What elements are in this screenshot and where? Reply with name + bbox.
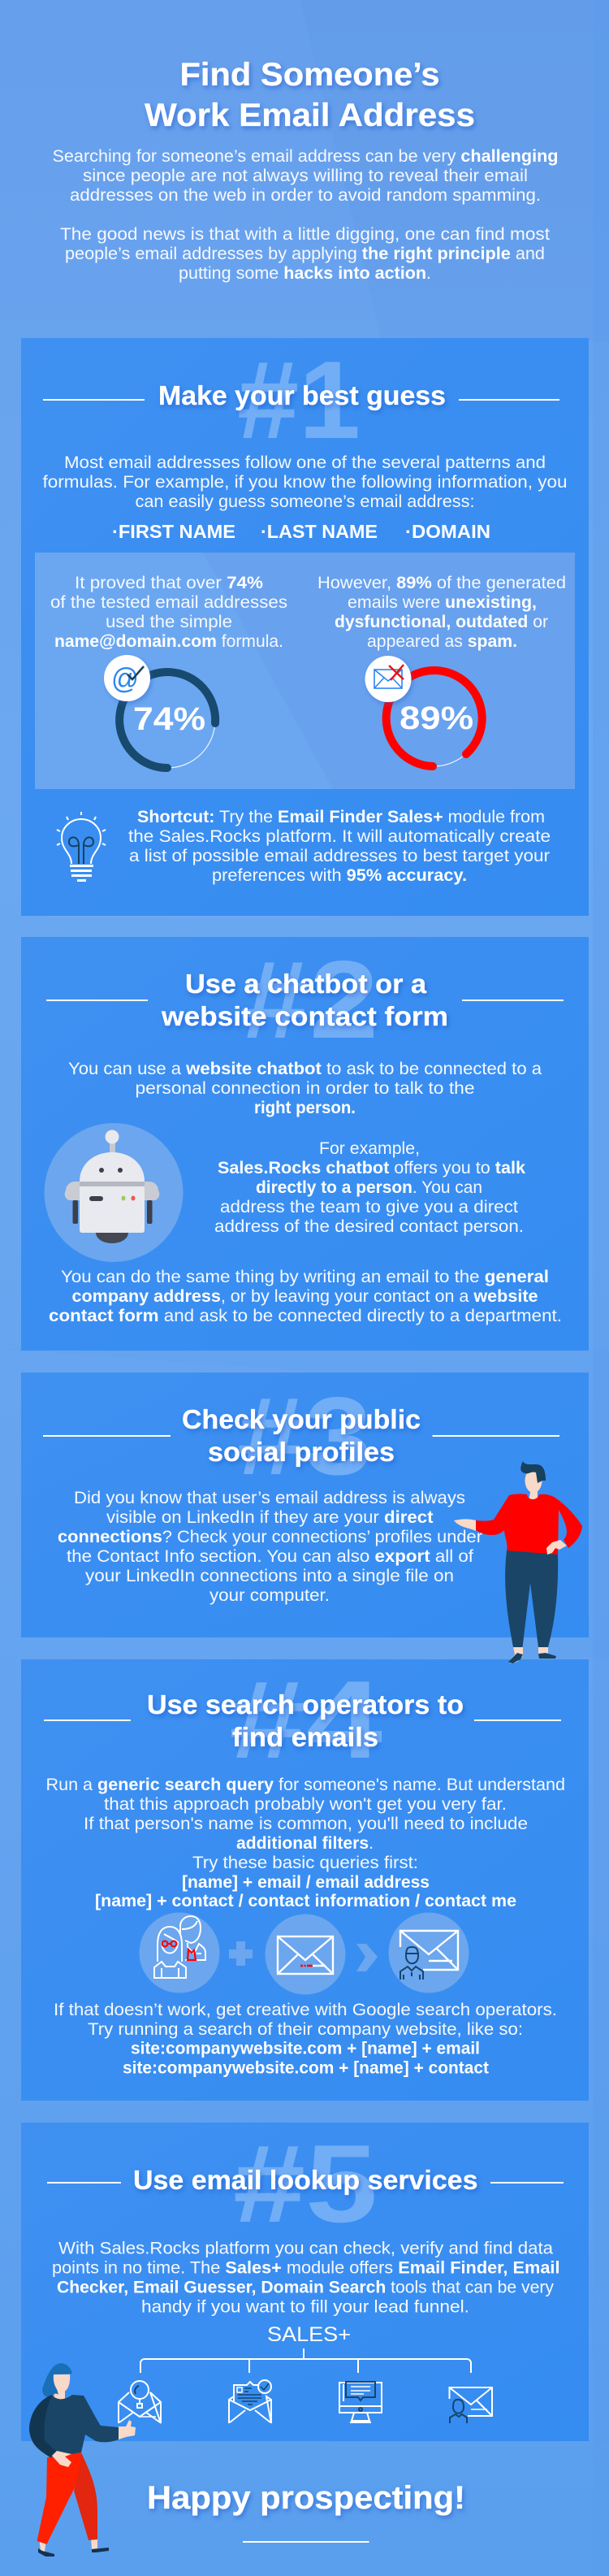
- donut chart 89%: 89%: [400, 700, 473, 736]
- text: sales rocks platform: [52, 2240, 560, 2316]
- text: generic search query: [name] + email / email address: [182, 1873, 430, 1892]
- panel: statistics: [35, 553, 575, 789]
- closing message: Happy prospecting!: [147, 2480, 465, 2516]
- icon: email guesser monitor: [339, 2382, 382, 2422]
- heading 2: [46, 969, 564, 1031]
- text: google search operators: Try running a search of their company website, like so:: [88, 2020, 523, 2039]
- text: patterns and formulas: can easily guess someone’s email address:: [135, 492, 474, 511]
- text: sales rocks chatbot example: For example,: [319, 1139, 420, 1158]
- number watermark 5: #5: [233, 2122, 378, 2245]
- icon: woman and man: [140, 1913, 219, 1993]
- text: general company address: You can do the same thing by writing an email to the general: [61, 1268, 549, 1286]
- text: sales rocks chatbot example: [214, 1139, 525, 1236]
- heading 5: Use email lookup services: [133, 2165, 477, 2195]
- intro text: people’s email addresses by applying the right principle and: [65, 245, 545, 263]
- heading 4: find emails: [232, 1722, 378, 1752]
- stat text 89%: emails were unexisting,: [348, 593, 537, 612]
- text: website chatbot: You can use a website chatbot to ask to be connected to a: [68, 1060, 542, 1078]
- title: [145, 57, 475, 133]
- heading 1: Make your best guess: [158, 380, 446, 410]
- text: linkedin connections: connections? Check your connections’ profiles under: [58, 1528, 482, 1546]
- stat text 74%: [50, 574, 287, 651]
- shortcut text: a list of possible email addresses to best target your: [129, 847, 550, 865]
- intro text: putting some hacks into action.: [179, 264, 431, 283]
- text: sales rocks chatbot example: directly to a person. You can: [256, 1178, 482, 1197]
- donut chart 74%: 74%: [133, 701, 205, 737]
- intro text: The good news is that with a little digging, one can find most: [60, 225, 550, 244]
- text: google search operators: site:companywebsite.com + [name] + email: [131, 2040, 480, 2058]
- stat text 89%: dysfunctional, outdated or: [335, 613, 548, 631]
- text: website chatbot: [68, 1060, 542, 1117]
- diagram: people plus email gives contact: [140, 1913, 469, 1994]
- panel: tip 1 make your best guess: [21, 338, 589, 916]
- number watermark 1: #1: [237, 338, 361, 462]
- intro text: addresses on the web in order to avoid random spamming.: [70, 186, 541, 205]
- stat text 89%: appeared as spam.: [367, 632, 517, 651]
- text: general company address: contact form and ask to be connected directly to a department.: [49, 1307, 562, 1325]
- heading 3: social profiles: [208, 1437, 395, 1467]
- text: website chatbot: right person.: [254, 1099, 356, 1117]
- text: sales rocks platform: handy if you want to fill your lead funnel.: [141, 2298, 469, 2316]
- number watermark 4: #4: [229, 1658, 382, 1781]
- text: general company address: company address, or by leaving your contact on a website: [71, 1287, 538, 1306]
- illustration: man in red sweater: [454, 1461, 582, 1663]
- icon: envelope with contact person: [388, 1913, 469, 1993]
- stat text 74%: of the tested email addresses: [50, 593, 287, 612]
- icon: envelope with cross: [365, 656, 411, 702]
- text: generic search query: Run a generic search query for someone's name. But understand: [45, 1776, 565, 1794]
- list: required information: ·FIRST NAME: [112, 521, 235, 542]
- panel: tip 2 chatbot or contact form: [21, 937, 589, 1351]
- icon: at sign with check: @: [111, 661, 139, 695]
- heading 2: Use a chatbot or a: [185, 969, 427, 999]
- title: Find Someone’s: [180, 57, 440, 93]
- heading 2: website contact form: [161, 1001, 448, 1031]
- text: website chatbot: personal connection in order to talk to the: [135, 1079, 474, 1098]
- text: linkedin connections: your LinkedIn connections into a single file on: [85, 1567, 454, 1585]
- text: sales rocks chatbot example: address the team to give you a direct: [220, 1198, 518, 1216]
- icon: light bulb: [57, 812, 106, 882]
- text: linkedin connections: [58, 1489, 482, 1605]
- title: Work Email Address: [145, 98, 475, 133]
- panel: tip 3 public social profiles: [21, 1373, 589, 1637]
- text: patterns and formulas: Most email addresses follow one of the several patterns and: [64, 453, 546, 472]
- icon: robot: [44, 1123, 184, 1262]
- text: generic search query: additional filters.: [236, 1834, 374, 1853]
- label: sales plus: SALES+: [267, 2323, 351, 2346]
- icon: email checker: [229, 2380, 271, 2423]
- list: required information: ·DOMAIN: [405, 521, 490, 542]
- list: required information: [112, 521, 490, 542]
- shortcut text: the Sales.Rocks platform. It will automatically create: [128, 827, 551, 846]
- text: sales rocks platform: With Sales.Rocks platform you can check, verify and find data: [58, 2240, 553, 2257]
- stat text 89%: However, 89% of the generated: [317, 574, 566, 592]
- list: required information: ·LAST NAME: [261, 521, 378, 542]
- text: linkedin connections: the Contact Info section. You can also export all of: [67, 1547, 473, 1566]
- text: generic search query: that this approach probably won't get you very far.: [104, 1795, 507, 1814]
- heading 4: [44, 1689, 561, 1752]
- shortcut text: [128, 808, 551, 885]
- heading 3: Check your public: [182, 1404, 421, 1434]
- intro text: [52, 147, 559, 283]
- icon: email finder: [119, 2381, 161, 2423]
- icon: domain search envelope: [450, 2387, 492, 2423]
- stat text 74%: used the simple: [106, 613, 232, 631]
- heading 3: [43, 1404, 559, 1467]
- text: google search operators: site:companywebsite.com + [name] + contact: [123, 2059, 489, 2077]
- shortcut text: Shortcut: Try the Email Finder Sales+ module from: [137, 808, 545, 826]
- text: sales rocks platform: points in no time. The Sales+ module offers Email Finder, Email: [52, 2259, 560, 2277]
- text: patterns and formulas: formulas. For example, if you know the following information, you: [42, 473, 568, 492]
- icon: plus: [229, 1941, 253, 1966]
- stat text 89%: [317, 574, 566, 651]
- donut chart 74%: [104, 655, 215, 768]
- number watermark 3: #3: [237, 1374, 372, 1498]
- panel: tip 4 search operators: [21, 1658, 589, 2101]
- text: linkedin connections: your computer.: [209, 1586, 330, 1605]
- text: sales rocks chatbot example: address of the desired contact person.: [214, 1217, 524, 1236]
- heading 4: Use search operators to: [147, 1689, 464, 1720]
- stat text 74%: name@domain.com formula.: [54, 632, 283, 651]
- shortcut text: preferences with 95% accuracy.: [212, 866, 467, 885]
- donut chart 89%: [365, 656, 482, 766]
- text: generic search query: [45, 1776, 565, 1910]
- intro text: Searching for someone’s email address can be very challenging: [52, 147, 559, 166]
- panel: tip 5 email lookup services: [21, 2122, 589, 2441]
- intro text: since people are not always willing to reveal their email: [83, 167, 528, 185]
- tree diagram: sales plus modules: [119, 2323, 492, 2423]
- text: general company address: [49, 1268, 562, 1325]
- text: sales rocks platform: Checker, Email Guesser, Domain Search tools that can be very: [57, 2279, 554, 2296]
- text: patterns and formulas: [42, 453, 568, 511]
- text: google search operators: [54, 2001, 557, 2077]
- stat text 74%: It proved that over 74%: [75, 574, 263, 592]
- text: linkedin connections: visible on LinkedIn if they are your direct: [106, 1508, 434, 1527]
- text: generic search query: If that person's name is common, you'll need to include: [84, 1815, 528, 1833]
- text: generic search query: [name] + contact / contact information / contact me: [95, 1892, 516, 1910]
- text: sales rocks chatbot example: Sales.Rocks chatbot offers you to talk: [218, 1159, 525, 1177]
- text: generic search query: Try these basic queries first:: [192, 1854, 418, 1872]
- illustration: woman with thumbs up: [29, 2363, 136, 2556]
- icon: chevron: [356, 1944, 378, 1971]
- text: linkedin connections: Did you know that user’s email address is always: [74, 1489, 465, 1507]
- tree connectors: [140, 2348, 471, 2373]
- icon: envelope: [265, 1915, 346, 1994]
- text: google search operators: If that doesn’t work, get creative with Google search operators.: [54, 2001, 557, 2019]
- number watermark 2: #2: [240, 938, 378, 1061]
